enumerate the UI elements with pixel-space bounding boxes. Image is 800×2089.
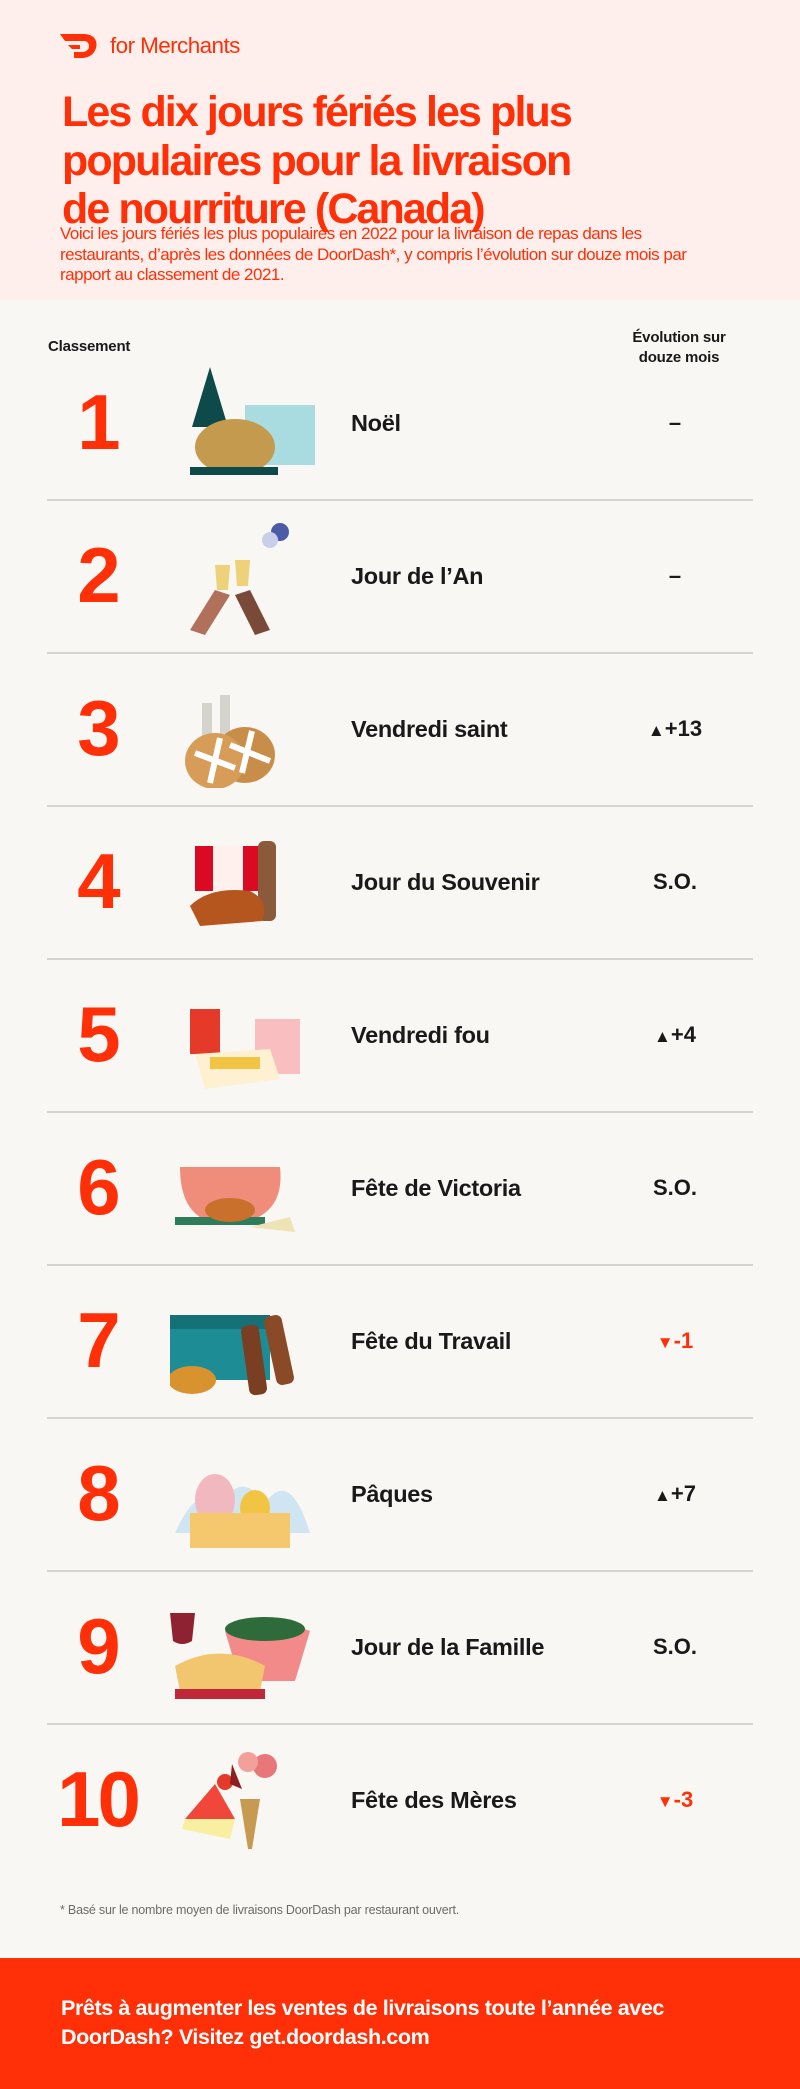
column heading: change: Évolution sur [632, 329, 726, 346]
icon: flag ribs beer [190, 841, 276, 926]
header background [0, 0, 800, 300]
column heading: change [632, 328, 726, 366]
row 9: Jour de la Famille [351, 1634, 544, 1660]
row 8: 8 [77, 1449, 118, 1537]
row 5 [77, 990, 696, 1089]
row 3 [77, 684, 702, 788]
title: Les dix jours fériés les plus [62, 88, 571, 136]
row 4 [77, 837, 697, 926]
footer call to action [0, 1958, 800, 2089]
row 10 [57, 1752, 693, 1849]
icon: cake and flowers [182, 1752, 277, 1849]
title: de nourriture (Canada) [62, 185, 484, 233]
column heading: change: douze mois [639, 349, 719, 366]
icon: teapot sandwich [175, 1167, 295, 1232]
row 3: 3 [77, 684, 118, 772]
row 4: 4 [77, 837, 118, 925]
row 5: 5 [77, 990, 118, 1078]
row 1: – [669, 410, 681, 435]
row 1: Noël [351, 410, 401, 436]
row 6: 6 [77, 1143, 118, 1231]
row 8 [77, 1449, 696, 1548]
row 6: Fête de Victoria [351, 1175, 521, 1201]
icon: cooler burger beers [170, 1315, 294, 1396]
row 5: ▲+4 [654, 1022, 696, 1047]
row 10: Fête des Mères [351, 1787, 517, 1813]
row 6: S.O. [653, 1175, 697, 1200]
row 4: Jour du Souvenir [351, 869, 539, 895]
title [62, 88, 571, 233]
row 8: Pâques [351, 1481, 433, 1507]
icon: fries and bag [190, 1009, 300, 1089]
icon: christmas turkey [190, 367, 315, 475]
row 6 [77, 1143, 697, 1232]
row 7: ▼-1 [657, 1328, 693, 1353]
row 2: Jour de l’An [351, 563, 483, 589]
row 9: S.O. [653, 1634, 697, 1659]
row 7: Fête du Travail [351, 1328, 511, 1354]
subtitle: Voici les jours fériés les plus populaires en 2022 pour la livraison de repas dans les restaurants, d’après les données de DoorDash*, y compris l’évolution sur douze mois par rapport au classement de 2021. [60, 224, 686, 284]
row 1 [77, 367, 681, 475]
footnote: * Basé sur le nombre moyen de livraisons DoorDash par restaurant ouvert. [60, 1903, 459, 1917]
row 10: 10 [57, 1755, 138, 1843]
row 2: 2 [77, 531, 118, 619]
row 4: S.O. [653, 869, 697, 894]
icon: easter basket [175, 1474, 310, 1548]
row 7 [77, 1296, 693, 1396]
row 7: 7 [77, 1296, 118, 1384]
row 2: – [669, 563, 681, 588]
row 5: Vendredi fou [351, 1022, 490, 1048]
icon: wine pie salad [170, 1613, 310, 1699]
title: populaires pour la livraison [62, 136, 570, 184]
footer call to action: Prêts à augmenter les ventes de livraisons toute l’année avec DoorDash? Visitez get.doordash.com [61, 1996, 664, 2049]
row 9: 9 [77, 1602, 118, 1690]
icon: hot cross buns [185, 695, 275, 788]
logo: for Merchants [110, 33, 240, 58]
row 2 [77, 523, 681, 635]
row 9 [77, 1602, 697, 1699]
row 3: Vendredi saint [351, 716, 507, 742]
column heading: rank: Classement [48, 338, 130, 355]
icon: toast [190, 523, 289, 635]
row 10: ▼-3 [657, 1787, 693, 1812]
row 3: ▲+13 [648, 716, 702, 741]
row 1: 1 [77, 378, 118, 466]
row 8: ▲+7 [654, 1481, 696, 1506]
